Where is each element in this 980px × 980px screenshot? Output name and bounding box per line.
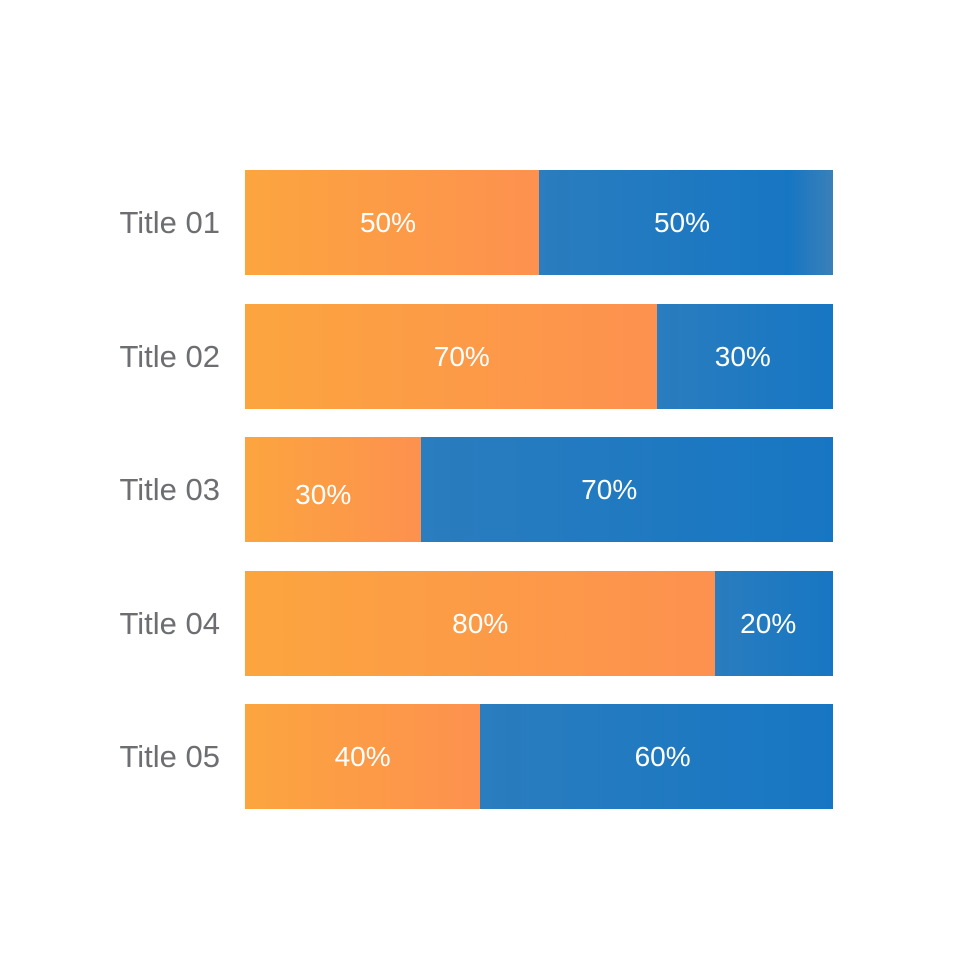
label: Title 02: Title 02 [119, 339, 220, 374]
bar: row 3: 30% [295, 478, 351, 510]
label: Title 01: Title 01 [119, 205, 220, 240]
bar: row 4 [245, 571, 833, 676]
bar: row 4: 80% [452, 608, 508, 638]
bar: row 2: 70% [434, 340, 490, 372]
label: Title 04: Title 04 [119, 606, 220, 641]
label: Title 05: Title 05 [119, 739, 220, 774]
bar: row 1 [245, 170, 833, 275]
label: Title 03: Title 03 [119, 472, 220, 507]
bar: row 3 [245, 437, 833, 542]
bar: row 1: 50% [360, 206, 416, 238]
bar: row 5: 60% [635, 740, 691, 772]
bar: row 5: 40% [335, 740, 391, 772]
bar: row 2 [245, 304, 833, 409]
bar: row 5 [245, 704, 833, 809]
bar: row 3: 70% [581, 474, 637, 504]
bar: row 1: 50% [654, 206, 710, 238]
bar: row 4: 20% [740, 608, 796, 638]
bar: row 2: 30% [715, 340, 771, 372]
